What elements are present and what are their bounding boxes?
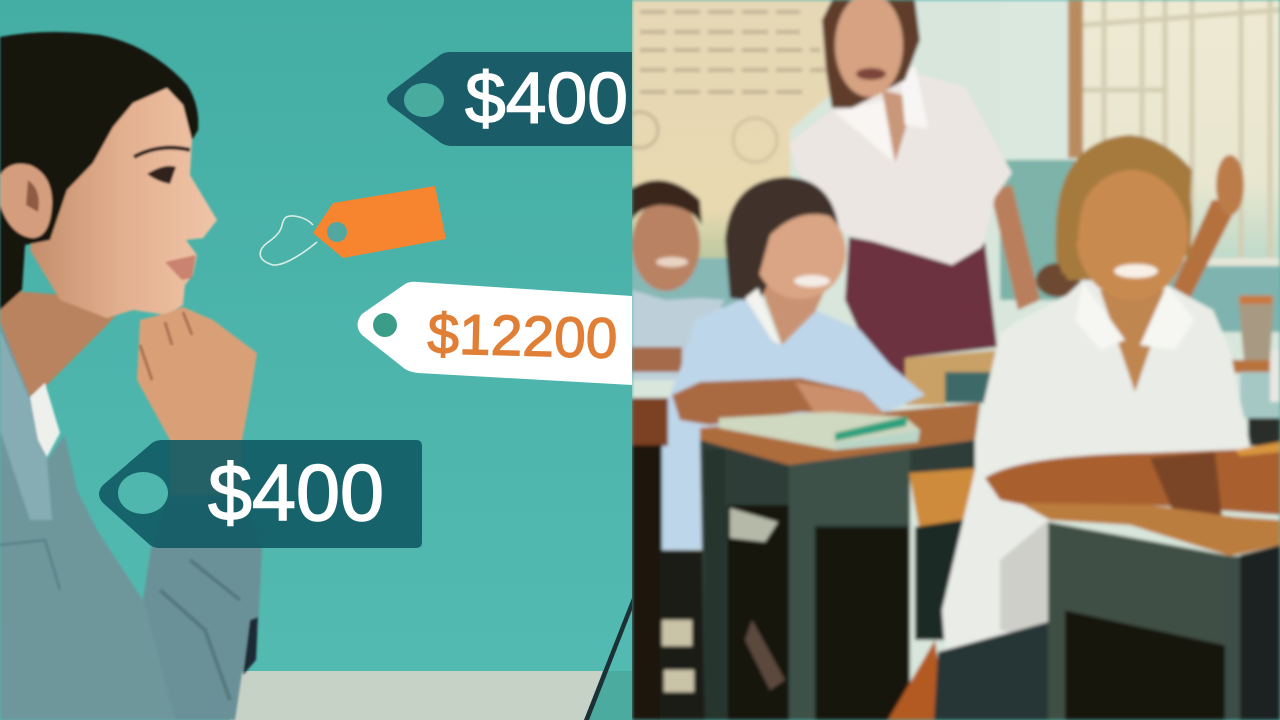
button detail xyxy=(243,617,258,675)
lips xyxy=(165,255,196,280)
eye and brow xyxy=(134,148,190,157)
teacher head xyxy=(822,0,920,108)
neck xyxy=(0,290,130,397)
boy on the left xyxy=(632,290,725,380)
center girl shirt xyxy=(660,298,925,550)
back desks xyxy=(905,350,1000,405)
pants xyxy=(934,622,1048,720)
price tag: white $12200: $12200 xyxy=(427,302,618,371)
panel: left teal background xyxy=(0,0,632,720)
jacket body xyxy=(0,322,175,720)
glass jar xyxy=(1238,295,1274,360)
book xyxy=(719,412,920,450)
price tag: white $12200 xyxy=(358,282,632,385)
poster wall with writing xyxy=(632,0,830,262)
panel: right classroom photo xyxy=(622,0,1280,720)
center girl head xyxy=(725,177,842,300)
teacher arm xyxy=(990,185,1040,310)
price tag: small orange tag with string xyxy=(260,186,446,265)
collar xyxy=(30,383,60,457)
center girl neck xyxy=(760,285,825,345)
hair xyxy=(0,32,198,310)
person: woman in profile with hand on chin xyxy=(0,32,262,720)
right girl arm and fist xyxy=(985,448,1280,515)
hand fist and wrist xyxy=(137,307,257,495)
window xyxy=(1068,0,1083,158)
sleeve xyxy=(143,493,262,720)
chair xyxy=(909,468,980,527)
face xyxy=(30,75,217,318)
right girl shirt xyxy=(942,280,1250,650)
right girl head xyxy=(1056,135,1192,280)
center girl arm and hand xyxy=(672,378,885,425)
ear xyxy=(0,164,52,238)
price tag: top $400: $400 xyxy=(465,59,628,139)
teacher skirt xyxy=(845,237,997,395)
price tag: top $400 xyxy=(387,52,632,146)
front desk xyxy=(1020,503,1280,556)
price tag: bottom $400: $400 xyxy=(208,448,384,537)
raised arm and bun behind girl xyxy=(1173,200,1240,298)
teal wall bands xyxy=(632,258,762,308)
left column xyxy=(632,398,668,446)
jacket lapel xyxy=(0,330,52,520)
price tag: bottom $400 xyxy=(99,440,422,548)
teacher shirt xyxy=(789,70,1012,265)
center desk xyxy=(700,403,980,465)
